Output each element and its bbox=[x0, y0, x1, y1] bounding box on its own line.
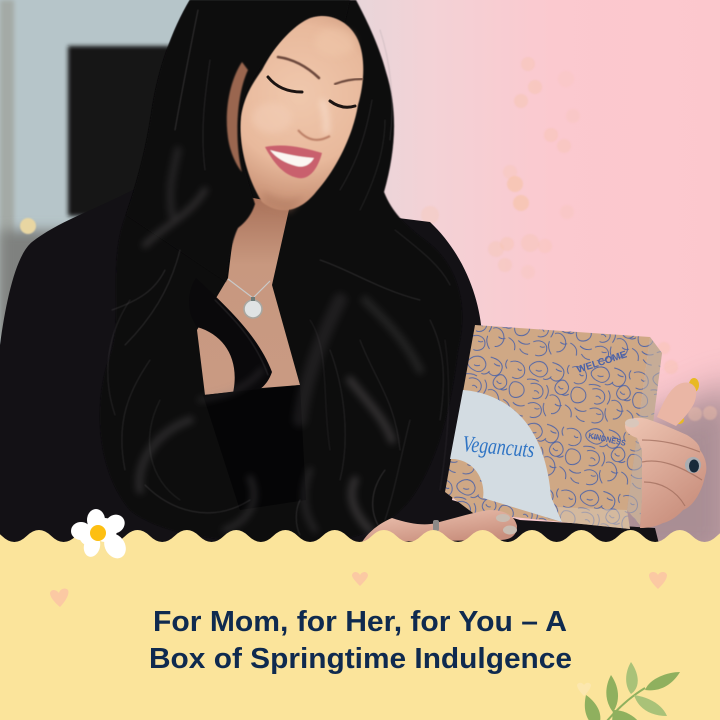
face bbox=[240, 16, 363, 210]
title bbox=[149, 606, 572, 675]
left hand under box bbox=[362, 510, 517, 542]
skin sliver behind hair bbox=[227, 62, 248, 172]
hair over face edge bbox=[126, 0, 350, 282]
gift box bbox=[445, 325, 662, 529]
background: blurred room and pink wash bbox=[0, 0, 720, 570]
smile bbox=[265, 146, 322, 178]
white label panel bbox=[450, 390, 562, 522]
brand name: Vegancuts bbox=[462, 431, 536, 462]
icon: heart right bbox=[649, 572, 667, 589]
woman bbox=[0, 0, 660, 548]
right hand holding box bbox=[625, 378, 706, 528]
title: For Mom, for Her, for You – A bbox=[153, 606, 567, 638]
title: Box of Springtime Indulgence bbox=[149, 643, 572, 675]
eyes and eyebrows bbox=[268, 57, 362, 107]
bokeh lights bbox=[20, 57, 717, 421]
box side flap bbox=[627, 337, 662, 525]
long dark hair bbox=[100, 0, 462, 541]
chest and neck skin bbox=[197, 195, 300, 395]
necklace bbox=[228, 279, 270, 318]
gem ring bbox=[685, 457, 701, 473]
hand and fingers bbox=[625, 418, 706, 528]
fingernail bbox=[625, 418, 639, 428]
yellow nails behind bbox=[689, 378, 699, 392]
icon: green leaf sprig bbox=[585, 662, 680, 720]
hair strand across chest bbox=[189, 278, 272, 395]
box stamped words: WELCOME bbox=[576, 349, 629, 376]
cheek and nose highlights bbox=[252, 28, 355, 212]
icon: heart left bbox=[50, 589, 68, 607]
box stamped words bbox=[576, 349, 629, 448]
fine hair strands bbox=[108, 10, 450, 535]
broad hair sheen bbox=[139, 150, 420, 530]
icon: daisy flower bbox=[71, 509, 130, 562]
box front with doodle pattern bbox=[445, 325, 650, 529]
black cardigan bbox=[0, 186, 660, 548]
yellow wavy band bbox=[0, 530, 720, 720]
box stamped words: KINDNESS bbox=[588, 431, 627, 448]
bottom flap shade bbox=[557, 507, 630, 529]
nose bbox=[298, 130, 330, 140]
black top bbox=[203, 385, 306, 510]
thumb bbox=[657, 383, 696, 426]
icon: heart center bbox=[352, 572, 368, 586]
icon: faint heart bbox=[577, 683, 591, 696]
